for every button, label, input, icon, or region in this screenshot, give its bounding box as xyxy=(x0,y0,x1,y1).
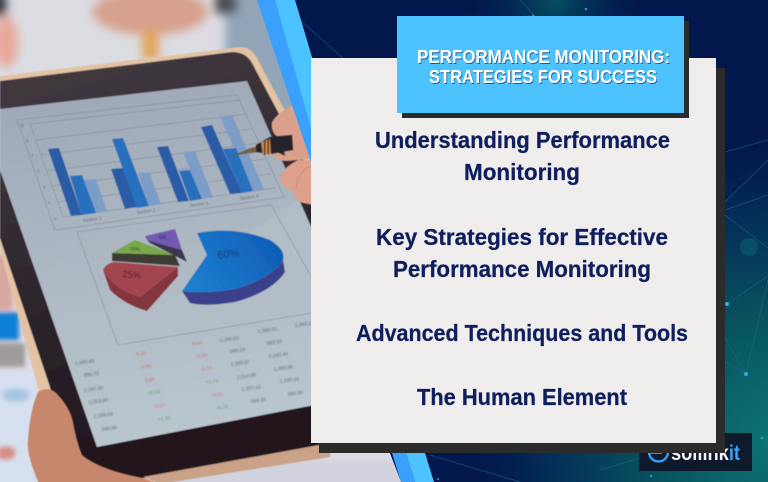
bars: section 3 xyxy=(157,146,213,202)
topic 2 xyxy=(376,224,668,282)
data table numbers: 1,350.40 xyxy=(74,358,95,367)
data table numbers: -6.06 xyxy=(190,340,203,348)
data table numbers: 1,014.85 xyxy=(236,372,257,381)
title text: PERFORMANCE MONITORING: xyxy=(417,47,670,67)
data table numbers: +0.03 xyxy=(147,389,161,397)
data table numbers: +1.18 xyxy=(157,415,171,423)
data table numbers: 1,156.53 xyxy=(93,411,114,420)
data table numbers: 1,060.22 xyxy=(294,320,315,329)
data table numbers: +1.71 xyxy=(205,378,219,386)
slice: 10% xyxy=(112,240,180,266)
data table numbers: 1,393.56 xyxy=(273,364,294,373)
data table numbers: 2,247.30 xyxy=(83,385,104,394)
title text xyxy=(417,47,670,87)
data table numbers: 1,190.16 xyxy=(279,376,300,385)
chart axis labels: Section 3 xyxy=(189,200,209,208)
title box shadow xyxy=(402,21,689,118)
data table numbers: -0.15 xyxy=(200,365,213,373)
data table numbers: 1,300.51 xyxy=(219,335,240,344)
data table numbers: 956.70 xyxy=(83,371,100,379)
slice: 5%: 5% xyxy=(159,235,167,241)
right hand fingers xyxy=(271,106,311,206)
topic 1: Understanding Performance xyxy=(375,127,670,153)
bars: section 1 xyxy=(48,148,107,216)
blurred office background xyxy=(0,0,420,482)
topic 1: Monitoring xyxy=(464,159,580,185)
slice: 5% xyxy=(145,229,187,262)
logo wordmark: sollinkit xyxy=(671,442,740,465)
data table numbers: 1,586.01 xyxy=(257,326,278,335)
slice: 60% xyxy=(182,231,285,305)
chart axis labels: 0 xyxy=(54,216,57,221)
data table numbers: -1.37 xyxy=(153,402,166,410)
data table numbers: 590.56 xyxy=(287,390,304,398)
chart axis labels: Section 4 xyxy=(239,193,259,201)
topic 2: Key Strategies for Effective xyxy=(376,224,668,250)
content panel xyxy=(311,58,716,443)
slice: 10%: 10% xyxy=(130,246,141,253)
data table numbers: -0.11 xyxy=(211,391,223,399)
photo: hand holding tablet with charts xyxy=(0,0,420,482)
data table numbers: 2,250.57 xyxy=(230,359,251,368)
slice: 60%: 60% xyxy=(217,247,240,262)
data table numbers: 3.65 xyxy=(144,377,155,384)
title box xyxy=(397,16,684,113)
chart axis labels: 3 xyxy=(37,168,40,173)
topic 1 xyxy=(375,127,670,185)
data table numbers: 544.35 xyxy=(250,397,267,405)
data table numbers: 1,013.80 xyxy=(88,397,109,406)
data table numbers: 586.24 xyxy=(229,347,246,355)
data table numbers: 2,240.44 xyxy=(268,351,289,360)
tablet body and frame xyxy=(0,47,335,482)
list of topics xyxy=(356,127,688,410)
topic 3: Advanced Techniques and Tools xyxy=(356,320,688,346)
tablet screen xyxy=(0,80,311,448)
chart axis labels: 6 xyxy=(21,123,24,128)
bottom hand holding tablet xyxy=(28,389,165,482)
data table numbers: -3.56 xyxy=(139,363,152,371)
slice: 25% xyxy=(103,262,178,311)
pie chart xyxy=(77,205,330,345)
bar chart xyxy=(17,95,284,230)
chart axis labels: Section 2 xyxy=(136,207,156,215)
logo icon xyxy=(648,452,668,462)
data table numbers: 1,157.41 xyxy=(241,384,262,393)
data table numbers xyxy=(74,320,315,433)
diagonal blue stripes xyxy=(257,0,434,482)
logo badge xyxy=(639,433,752,471)
data table numbers: -0.23 xyxy=(195,352,208,360)
chart axis labels xyxy=(21,123,259,223)
data table numbers: 983.03 xyxy=(266,339,283,347)
bars: section 4 xyxy=(201,115,264,194)
chart axis labels: 5 xyxy=(26,138,29,143)
slice: 25%: 25% xyxy=(122,269,142,282)
chart axis labels: 4 xyxy=(31,153,34,158)
topic 2: Performance Monitoring xyxy=(393,256,651,282)
data table numbers: 545.56 xyxy=(101,425,118,433)
bars: section 2 xyxy=(111,138,161,209)
pen xyxy=(232,135,293,156)
topic 4: The Human Element xyxy=(417,384,627,410)
chart axis labels: Section 1 xyxy=(82,215,102,223)
data table numbers: +0.72 xyxy=(215,404,229,412)
data table numbers: -6.35 xyxy=(134,350,147,358)
content panel shadow xyxy=(319,68,725,453)
title text: STRATEGIES FOR SUCCESS xyxy=(429,67,657,87)
chart axis labels: 1 xyxy=(48,200,51,205)
chart axis labels: 2 xyxy=(43,184,46,189)
